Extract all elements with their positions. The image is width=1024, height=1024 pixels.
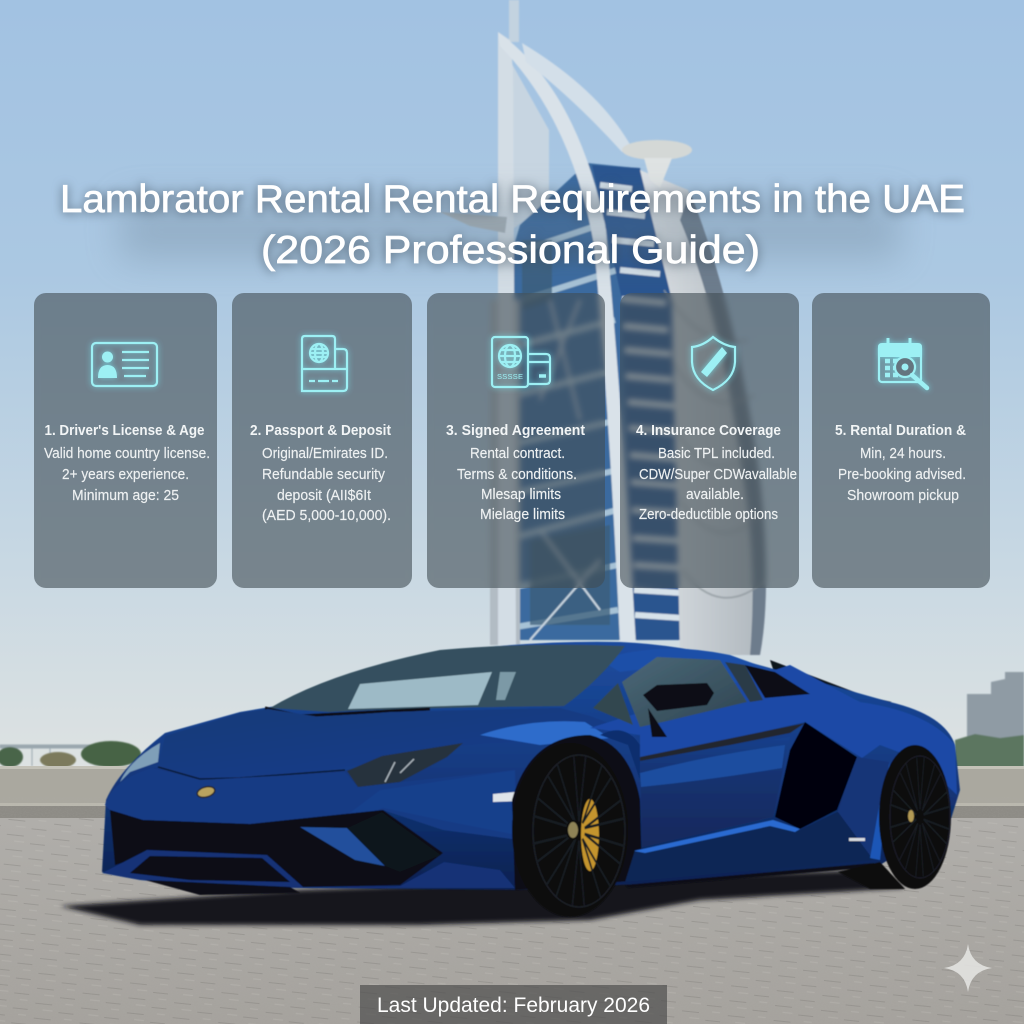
heading: 2. Passport & Deposit bbox=[250, 422, 391, 439]
left headlight bbox=[120, 743, 160, 782]
car: Lamborghini bbox=[102, 642, 960, 917]
windshield bbox=[270, 645, 625, 712]
rear wheel bbox=[838, 745, 951, 889]
body text bbox=[44, 446, 210, 504]
body text: Min, 24 hours. bbox=[860, 446, 946, 462]
door panel bbox=[640, 737, 790, 847]
front bumper and intakes bbox=[110, 810, 443, 887]
heading: 5. Rental Duration & bbox=[835, 422, 966, 439]
icon: shield bbox=[692, 337, 735, 390]
front wheel bbox=[512, 743, 628, 917]
paved ground bbox=[0, 818, 1024, 1024]
nose bbox=[105, 768, 520, 840]
heading: 4. Insurance Coverage bbox=[636, 422, 781, 439]
body text bbox=[639, 446, 797, 523]
body text: Showroom pickup bbox=[847, 488, 959, 504]
title bbox=[56, 178, 967, 276]
title: Lambrator Rental Rental Requirements in the UAE bbox=[60, 178, 965, 221]
helipad bbox=[622, 140, 692, 160]
footer badge: last updated bbox=[360, 985, 667, 1024]
body text: 2+ years experience. bbox=[62, 467, 189, 483]
icon: ID card bbox=[92, 343, 157, 386]
icon: calendar with magnifier bbox=[878, 338, 927, 388]
front wheel arch bbox=[512, 735, 642, 890]
banded tower strip bbox=[592, 165, 682, 640]
heading: 3. Signed Agreement bbox=[446, 422, 585, 439]
glass facade bbox=[492, 163, 640, 640]
title: (2026 Professional Guide) bbox=[261, 229, 760, 272]
panel: signed agreement bbox=[427, 293, 605, 588]
body shell bbox=[102, 642, 960, 890]
body text bbox=[262, 446, 391, 524]
panel: driver's license and age bbox=[34, 293, 217, 588]
body text: Basic TPL included. bbox=[658, 446, 775, 462]
sparkle watermark bbox=[944, 944, 992, 992]
sky bbox=[0, 0, 1024, 780]
body text: Mielage limits bbox=[480, 507, 565, 523]
body text bbox=[838, 446, 966, 504]
plaza wall bbox=[0, 766, 1024, 806]
distant skyline bbox=[0, 672, 1024, 768]
body text bbox=[457, 446, 577, 523]
side air intake bbox=[775, 722, 857, 829]
footer badge: last updated: Last Updated: February 2026 bbox=[377, 994, 650, 1017]
body text: Original/Emirates ID. bbox=[262, 446, 388, 462]
body text: available. bbox=[686, 487, 744, 503]
side windows bbox=[622, 657, 747, 727]
body text: Terms & conditions. bbox=[457, 467, 577, 483]
headlight bbox=[347, 743, 463, 787]
panel: insurance coverage bbox=[620, 293, 799, 588]
fabric sail bbox=[640, 170, 766, 655]
panel: passport and deposit bbox=[232, 293, 412, 588]
body text: Refundable security bbox=[262, 467, 386, 483]
Burj Al Arab tower bbox=[440, 0, 766, 655]
icon: passport with card bbox=[302, 336, 347, 391]
body text: deposit (AII$6It bbox=[277, 488, 371, 504]
car shadow bbox=[60, 870, 905, 925]
white exoskeleton arches bbox=[498, 32, 516, 645]
rear spoiler bbox=[770, 660, 892, 705]
body text: Rental contract. bbox=[470, 446, 565, 462]
icon: document with globe and card: SSSSE bbox=[497, 372, 523, 381]
body text: Minimum age: 25 bbox=[72, 488, 179, 504]
body text: Pre-booking advised. bbox=[838, 467, 966, 483]
title shade bbox=[120, 200, 900, 260]
body text: Zero-deductible options bbox=[639, 507, 778, 523]
flank upper bbox=[590, 665, 957, 795]
rear haunch bbox=[838, 757, 889, 858]
emblem bbox=[196, 785, 216, 799]
body text: Valid home country license. bbox=[44, 446, 210, 462]
side sill bbox=[625, 812, 872, 882]
hood bbox=[158, 708, 640, 779]
icon: document with globe and card bbox=[492, 337, 550, 387]
roof highlight bbox=[600, 649, 860, 702]
panel: rental duration bbox=[812, 293, 990, 588]
body text: (AED 5,000-10,000). bbox=[262, 508, 391, 524]
body text: Mlesap limits bbox=[481, 487, 561, 503]
mirror bbox=[643, 683, 714, 737]
